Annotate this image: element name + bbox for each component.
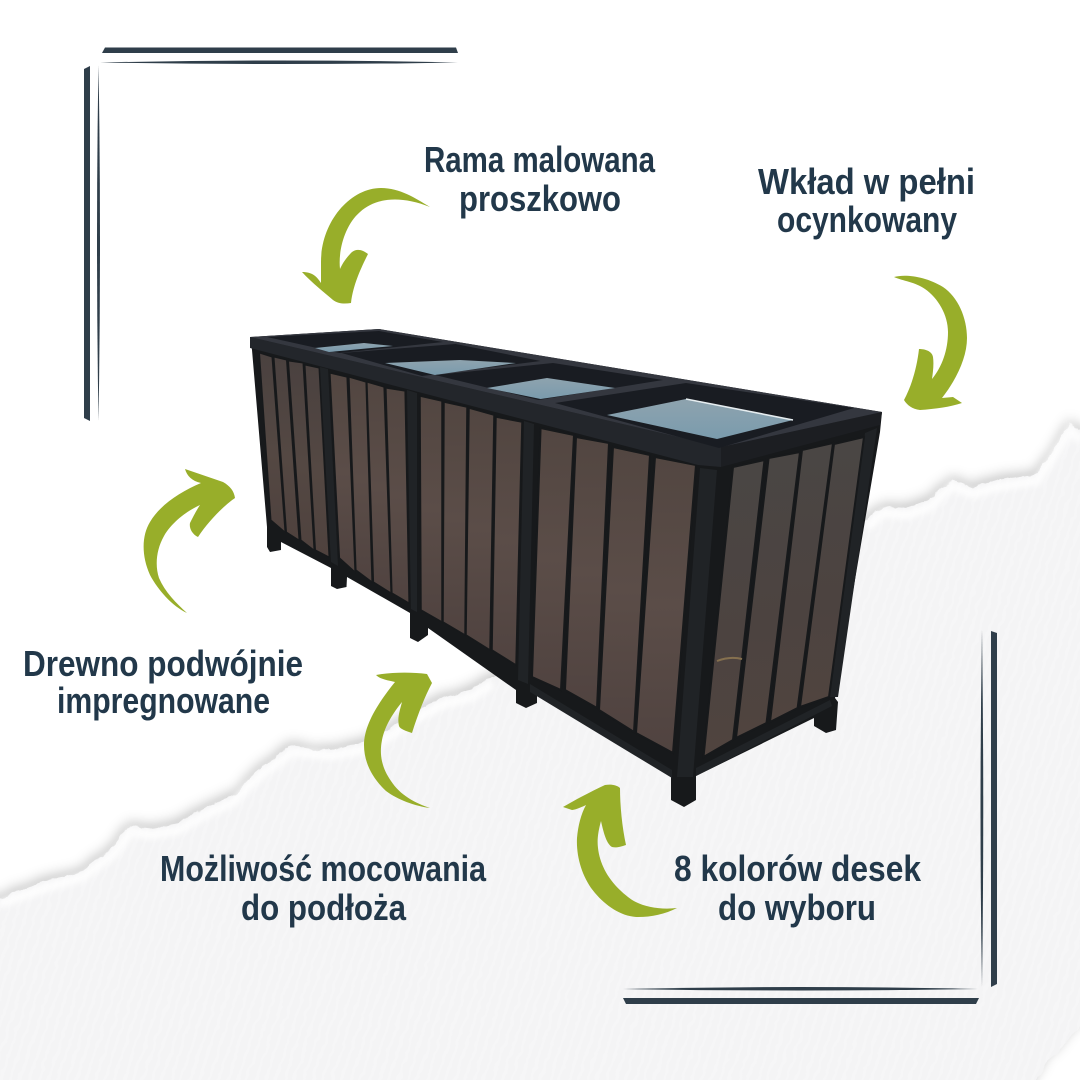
planter: front planks section 3	[420, 396, 522, 665]
label: colours: do wyboru	[718, 887, 876, 928]
planter: opening 4	[555, 383, 854, 448]
arrow: wood	[144, 469, 235, 613]
planter: front planks section 2	[330, 373, 409, 603]
label: colours	[674, 848, 922, 928]
arrow: frame	[302, 188, 430, 304]
corner frame: top left	[84, 48, 458, 421]
label: wood: impregnowane	[57, 680, 270, 721]
label: insert: ocynkowany	[777, 199, 957, 240]
arrow: mounting	[364, 673, 432, 808]
planter: side top band	[721, 412, 882, 467]
planter: side planks	[704, 437, 864, 757]
label: wood: Drewno podwójnie	[23, 643, 303, 684]
planter: knot detail	[717, 658, 742, 661]
label: frame: proszkowo	[459, 178, 621, 219]
label: mounting: Możliwość mocowania	[160, 848, 487, 889]
planter: front planks section 4	[532, 428, 696, 753]
label: frame	[424, 139, 656, 219]
planter: front planks section 1	[260, 353, 329, 557]
label: mounting: do podłoża	[241, 887, 407, 928]
label: colours: 8 kolorów desek	[674, 848, 922, 889]
planter: top surface	[250, 329, 882, 447]
arrow: colours	[563, 785, 677, 917]
label: wood	[23, 643, 303, 721]
planter: side posts and rails	[320, 367, 877, 778]
planter: front top band	[250, 337, 721, 467]
planter: opening 2	[342, 344, 541, 376]
arrow: insert	[894, 276, 967, 410]
planter product photo	[250, 329, 882, 807]
planter: frame silhouette	[250, 329, 882, 807]
corner frame: bottom right	[623, 630, 997, 1004]
planter: opening 3	[435, 363, 663, 400]
label: frame: Rama malowana	[424, 139, 656, 180]
label: insert: Wkład w pełni	[758, 161, 975, 202]
label: insert	[758, 161, 975, 240]
planter: opening 1	[267, 331, 443, 353]
background: torn paper sheet	[0, 423, 1080, 1080]
label: mounting	[160, 848, 487, 928]
